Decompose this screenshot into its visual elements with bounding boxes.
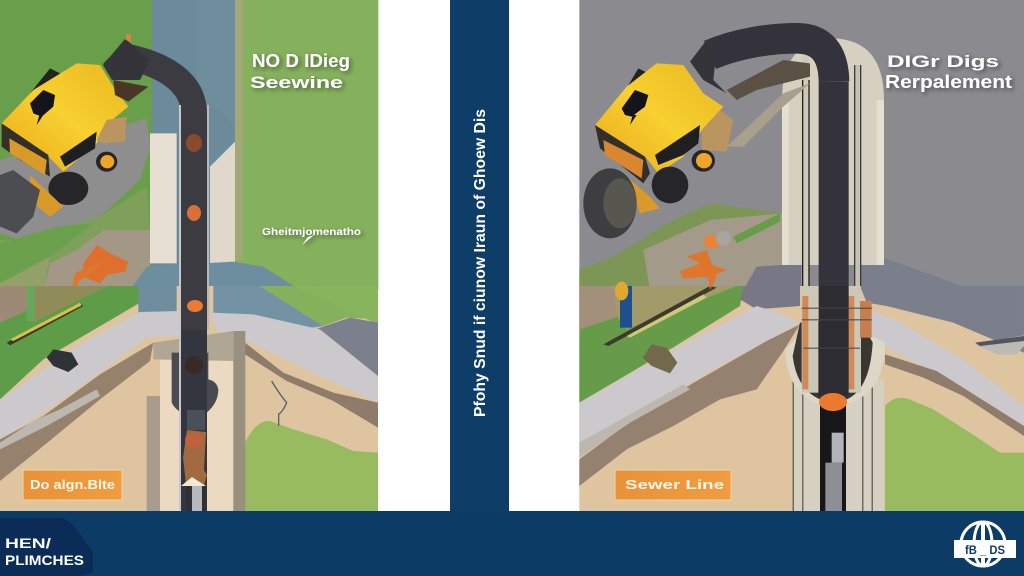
panel: dig replacement illustration (579, 0, 1024, 511)
logo: globe badge (954, 522, 1016, 566)
title: no dig sewer: NO D IDieg (252, 51, 350, 71)
panel: no dig sewer illustration (0, 0, 378, 511)
icon: orange digging tool (73, 245, 128, 290)
orange label: right (615, 470, 731, 500)
footer tab with brand text (0, 518, 93, 576)
left scene lower half (0, 286, 378, 511)
marker: orange ball (187, 205, 201, 221)
right scene lower half (579, 282, 1024, 511)
left scene upper half (0, 0, 378, 290)
workers and stones (680, 231, 731, 290)
panel: centre navy spine (450, 0, 509, 511)
footer tab with brand text: HEN/ (5, 535, 51, 551)
callout: small annotation (262, 227, 361, 245)
footer tab with brand text: PLIMCHES (5, 552, 84, 568)
marker: brown ball (186, 134, 202, 152)
spine vertical text: Pfohy Snud if ciunow Iraun of Ghoew Dis (472, 109, 489, 417)
pipe fittings lower section (181, 356, 207, 511)
title: dig replacement: DIGr Digs (887, 52, 999, 71)
title: dig replacement: Rerpalement (885, 72, 1012, 92)
orange label: left: Do algn.Blte (30, 477, 115, 492)
orange label: left (23, 470, 122, 500)
orange label: right: Sewer Line (625, 477, 724, 492)
panel: bottom navy footer (0, 511, 1024, 576)
title: dig replacement (885, 52, 1012, 92)
callout: small annotation: Gheitmjomenatho (262, 227, 361, 238)
title: no dig sewer: Seewine (250, 73, 343, 92)
orange ball at pipe (819, 393, 847, 411)
right scene upper half (579, 0, 1024, 290)
title: no dig sewer (250, 51, 350, 92)
marker: orange dot (187, 300, 203, 312)
logo: globe badge: fB _ DS (965, 543, 1005, 557)
icon: yellow machine right (583, 40, 733, 238)
icon: yellow machine (0, 40, 150, 233)
vertical sewer pipe (103, 34, 209, 511)
